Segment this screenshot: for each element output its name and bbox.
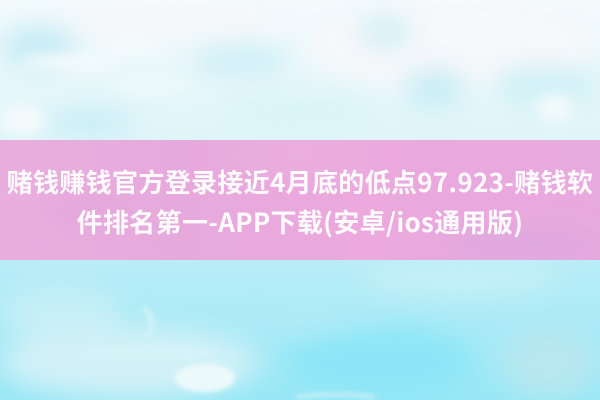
title: first line: 赌钱赚钱官方登录接近4月底的低点97.923-赌钱软 (7, 163, 593, 200)
title: second line: 件排名第一-APP下载(安卓/ios通用版) (77, 203, 523, 240)
banner: pink title band (0, 140, 600, 260)
